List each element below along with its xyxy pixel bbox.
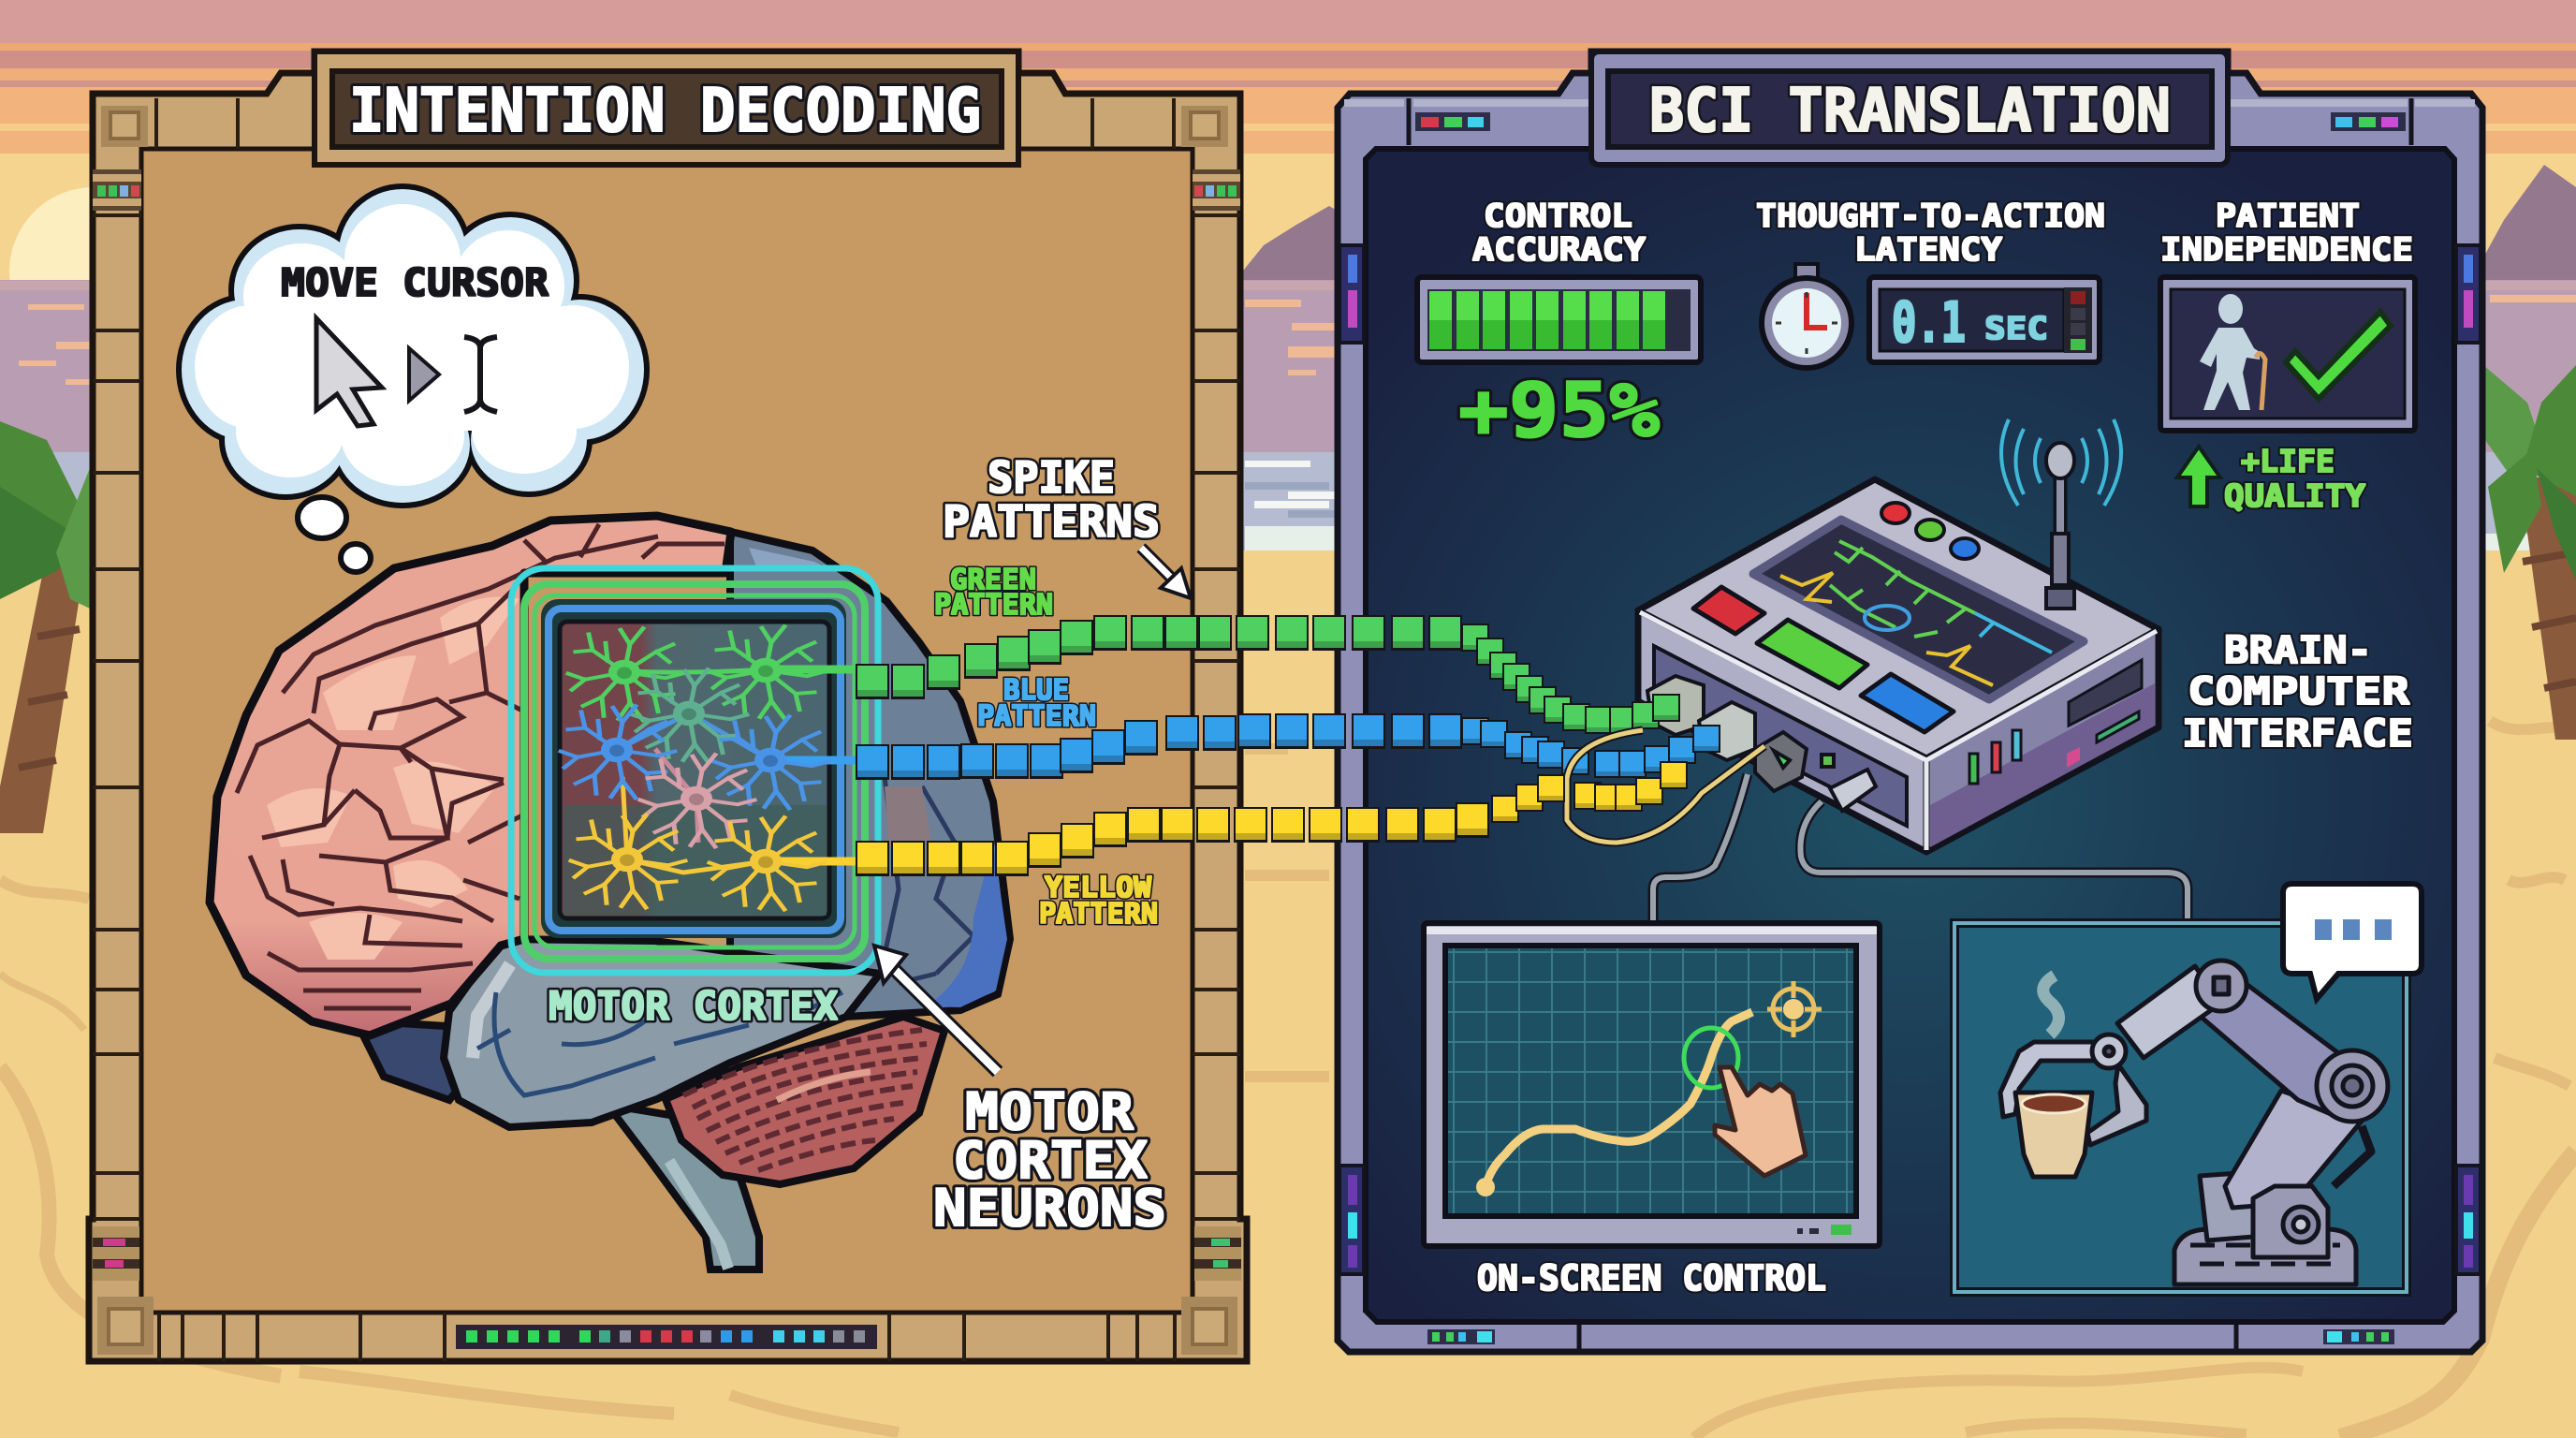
life quality callout bbox=[2177, 443, 2365, 514]
on-screen control monitor bbox=[1424, 923, 1880, 1299]
green pattern label bbox=[934, 564, 1053, 622]
metric: control accuracy bbox=[1417, 198, 1701, 454]
blue pattern label bbox=[977, 674, 1096, 733]
on-screen control caption: ON-SCREEN CONTROL bbox=[1477, 1258, 1826, 1299]
independence label: INDEPENDENCE bbox=[2160, 231, 2413, 269]
icon: walking figure with cane bbox=[2200, 294, 2265, 410]
control accuracy label bbox=[1472, 198, 1647, 269]
move cursor text: MOVE CURSOR bbox=[281, 260, 549, 305]
blue pattern label: PATTERN bbox=[977, 700, 1096, 733]
motor cortex label: MOTOR CORTEX bbox=[549, 983, 838, 1029]
speech bubble bbox=[2283, 884, 2422, 999]
brain stem bbox=[607, 1105, 759, 1269]
teal neuron bbox=[633, 669, 747, 761]
monitor bezel bbox=[1424, 923, 1880, 1246]
sea bbox=[0, 280, 2576, 550]
brain-computer interface label: COMPUTER bbox=[2188, 670, 2410, 713]
spike patterns label: PATTERNS bbox=[943, 496, 1160, 547]
brain illustration bbox=[210, 516, 1010, 1269]
motor cortex neurons label: CORTEX bbox=[953, 1131, 1148, 1190]
brain-computer interface label: BRAIN- bbox=[2224, 629, 2372, 672]
latency label bbox=[1756, 198, 2105, 269]
bottom LED strip bbox=[456, 1325, 877, 1349]
arrow: motor cortex neurons bbox=[874, 946, 998, 1072]
life quality callout: QUALITY bbox=[2224, 477, 2365, 514]
cerebrum bbox=[210, 516, 731, 1035]
independence label: PATIENT bbox=[2216, 198, 2360, 235]
icon: coffee cup bbox=[2015, 1093, 2092, 1177]
robot arm bbox=[2000, 961, 2388, 1284]
trail start dot bbox=[1476, 1178, 1495, 1196]
brain-computer interface label bbox=[2182, 629, 2413, 756]
parietal occipital lobes bbox=[730, 532, 1010, 1017]
robotic arm panel bbox=[1954, 884, 2422, 1292]
cursor trail bbox=[1486, 1012, 1752, 1187]
device side indicators bbox=[1969, 660, 2142, 784]
arrow: spike patterns bbox=[1141, 548, 1191, 598]
spike train: blue pattern bbox=[856, 713, 1720, 780]
cloud shape bbox=[182, 189, 644, 503]
frame indicator lights bbox=[1339, 117, 2481, 1343]
latency label: LATENCY bbox=[1854, 231, 2003, 269]
distant mountains bbox=[1236, 165, 2576, 280]
left palm tree bbox=[0, 421, 90, 833]
accuracy bar bbox=[1417, 277, 1701, 362]
icon: mouse pointer bbox=[316, 318, 382, 426]
device connectors bbox=[1647, 676, 1876, 811]
output cables to monitor and robot bbox=[1653, 774, 2188, 922]
robot panel border bbox=[1954, 923, 2407, 1292]
selection ring bbox=[1684, 1028, 1738, 1088]
yellow pattern label bbox=[1039, 872, 1158, 931]
device lower face tint bbox=[1930, 683, 2155, 847]
lower tissue band bbox=[564, 805, 827, 916]
metal frame bbox=[1338, 51, 2482, 1352]
independence label bbox=[2160, 198, 2413, 269]
yellow neurons bbox=[571, 815, 824, 909]
spike patterns label: SPIKE bbox=[988, 452, 1115, 503]
green pattern label: PATTERN bbox=[934, 589, 1053, 622]
latency readout: 0.1 bbox=[1892, 290, 1966, 356]
device buttons bbox=[1693, 587, 1954, 732]
signal wires at interface bbox=[1567, 730, 1764, 843]
antenna bbox=[2046, 443, 2074, 609]
yellow pattern label: PATTERN bbox=[1039, 898, 1158, 931]
BCI device bbox=[1638, 419, 2159, 852]
blue neurons bbox=[561, 706, 828, 808]
motor cortex neurons label: NEURONS bbox=[933, 1179, 1166, 1238]
dark underside lobe bbox=[356, 1020, 505, 1100]
right palm tree bbox=[2483, 365, 2576, 740]
metric: thought-to-action latency bbox=[1756, 198, 2105, 368]
radio waves bbox=[2001, 419, 2121, 506]
pink neuron bbox=[640, 755, 754, 846]
neuron network bbox=[561, 626, 856, 909]
icon: transition triangle bbox=[409, 348, 439, 401]
frame status lights bbox=[97, 185, 1237, 1268]
thought dots bbox=[298, 497, 371, 572]
device left face recess bbox=[1654, 646, 1907, 826]
neuron connections bbox=[617, 669, 856, 873]
spike patterns label bbox=[943, 452, 1160, 547]
blue lobe edge bbox=[927, 843, 1007, 1007]
life quality callout: +LIFE bbox=[2241, 443, 2334, 479]
robot panel background bbox=[1954, 923, 2407, 1292]
steam bbox=[2043, 976, 2059, 1034]
panel: intention decoding frame bbox=[89, 51, 1247, 1361]
latency readout bbox=[1869, 277, 2100, 362]
device LEDs bbox=[1881, 503, 1979, 559]
motor cortex neurons label bbox=[933, 1082, 1166, 1238]
sand streaks bbox=[0, 721, 2576, 1438]
temporal lobe bbox=[444, 939, 880, 1127]
spike train: green pattern bbox=[856, 615, 1680, 734]
title plaque: intention decoding: INTENTION DECODING bbox=[349, 77, 981, 146]
brain-computer interface label: INTERFACE bbox=[2182, 712, 2413, 756]
cerebellum bbox=[666, 1017, 944, 1184]
control accuracy label: CONTROL bbox=[1484, 198, 1632, 235]
latency label: THOUGHT-TO-ACTION bbox=[1756, 198, 2105, 235]
left panel annotations bbox=[874, 452, 1191, 1238]
glowing concentric frames bbox=[511, 568, 878, 973]
title plaque: intention decoding bbox=[315, 51, 1018, 165]
blue pattern label: BLUE bbox=[1003, 674, 1069, 707]
accuracy value: +95% bbox=[1458, 367, 1660, 454]
panel: BCI translation frame bbox=[1338, 51, 2482, 1352]
device case bbox=[1638, 479, 2159, 852]
cell tissue background bbox=[560, 622, 829, 918]
title plaque: BCI translation bbox=[1591, 51, 2228, 165]
green neurons bbox=[568, 626, 824, 720]
device highlight edges bbox=[1640, 612, 2157, 850]
icon: green check mark bbox=[2286, 312, 2391, 399]
motor cortex window bbox=[511, 568, 878, 1029]
yellow pattern label: YELLOW bbox=[1045, 872, 1152, 904]
green pattern label: GREEN bbox=[950, 564, 1036, 596]
sun bbox=[9, 187, 178, 356]
stone frame bbox=[89, 51, 1247, 1361]
control accuracy label: ACCURACY bbox=[1472, 231, 1647, 269]
thought bubble: move cursor bbox=[182, 189, 644, 572]
latency readout: SEC bbox=[1984, 310, 2048, 346]
title plaque: BCI translation: BCI TRANSLATION bbox=[1649, 77, 2171, 146]
metric: patient independence bbox=[2160, 198, 2415, 514]
independence panel bbox=[2160, 277, 2415, 431]
motor cortex neurons label: MOTOR bbox=[965, 1082, 1134, 1141]
device screen bbox=[1753, 520, 2084, 699]
icon: text I-beam bbox=[464, 337, 497, 412]
spike train: yellow pattern bbox=[856, 761, 1688, 876]
target reticle bbox=[1767, 981, 1822, 1037]
icon: stopwatch bbox=[1762, 264, 1852, 368]
icon: pointing hand bbox=[1715, 1067, 1806, 1176]
